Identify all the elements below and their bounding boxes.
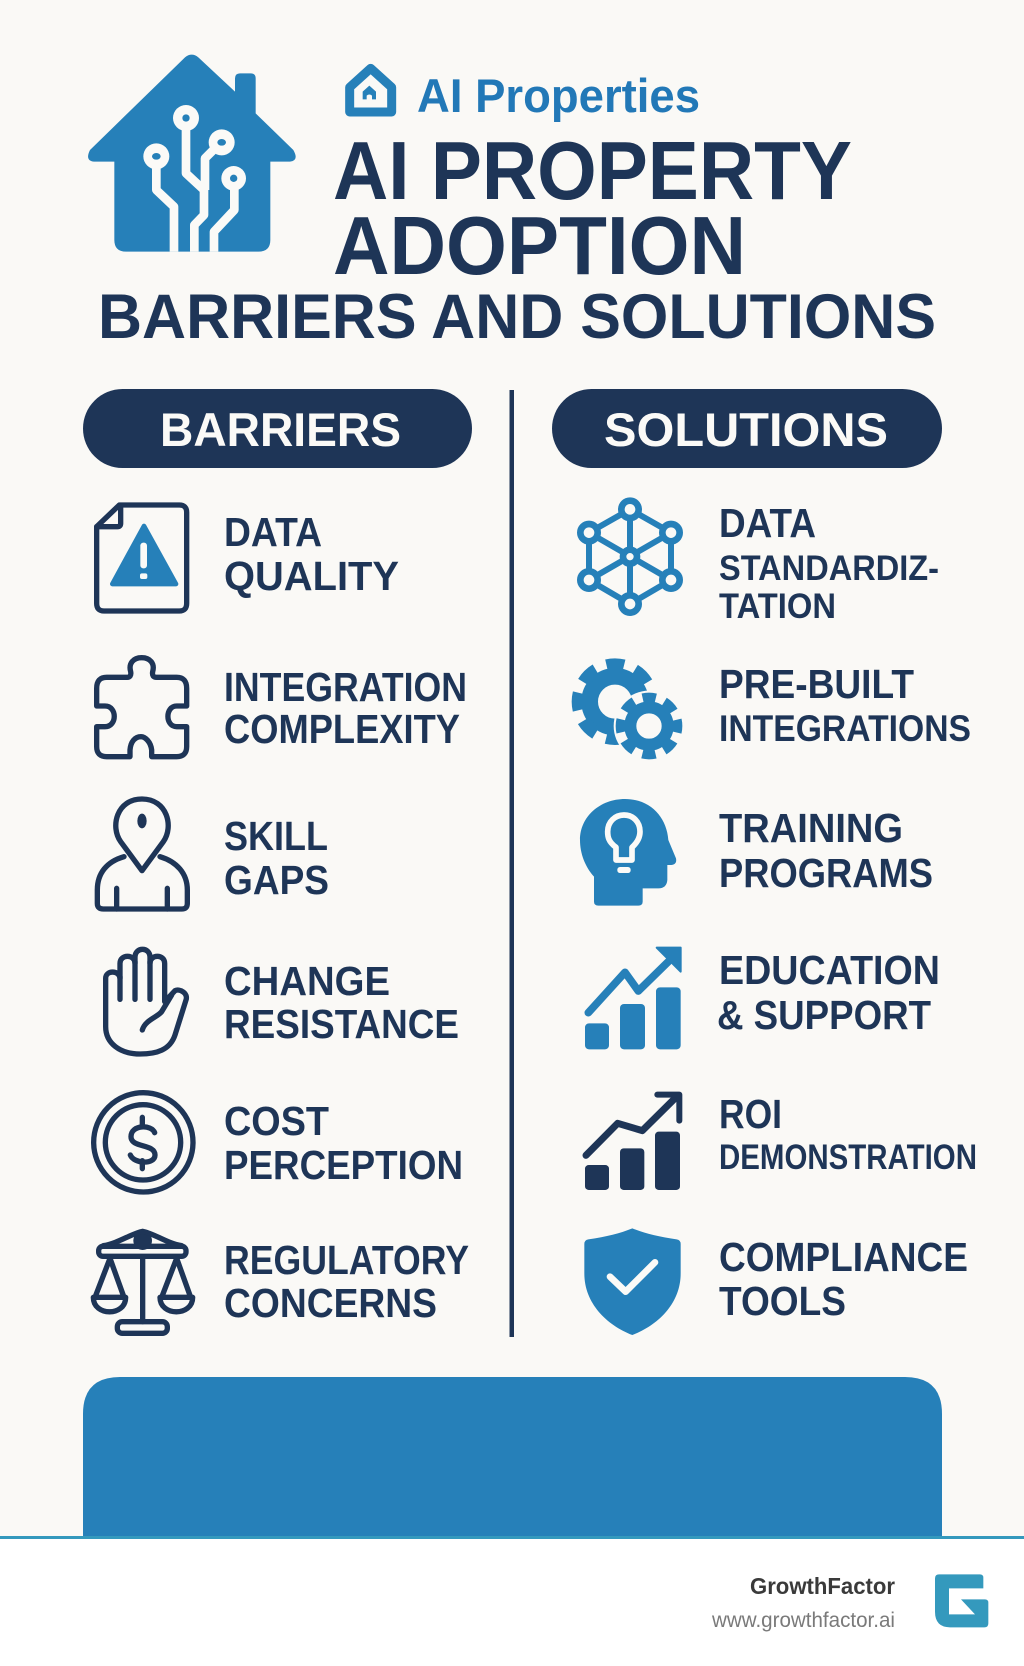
label: COMPLIANCE: [719, 1234, 968, 1280]
header: [88, 55, 936, 352]
label: [224, 664, 467, 752]
label: DEMONSTRATION: [719, 1138, 977, 1177]
footer url: www.growthfactor.ai: [711, 1609, 895, 1632]
label: PROGRAMS: [719, 850, 933, 896]
label: [719, 805, 933, 896]
icon: puzzle piece: [97, 658, 187, 757]
label: [719, 500, 939, 626]
label: [224, 813, 329, 903]
barrier: skill gaps: [97, 799, 329, 909]
label: SKILL: [224, 813, 328, 859]
label: TOOLS: [719, 1278, 846, 1324]
solution: training programs: [580, 799, 933, 906]
brand name: AI Properties: [417, 69, 700, 122]
panel: barriers: [83, 389, 472, 1333]
title: [333, 124, 852, 292]
icon: gears: [578, 665, 684, 761]
label: STANDARDIZ-: [719, 549, 939, 588]
barrier: data quality: [97, 505, 399, 611]
icon: house with circuit lines: [88, 55, 296, 252]
icon: navy bar chart with arrow: [585, 1095, 680, 1190]
solution: pre-built integrations: [578, 661, 971, 761]
icon: raised hand: [106, 949, 186, 1054]
label: [717, 947, 940, 1038]
label: [224, 509, 399, 599]
label: [719, 1091, 977, 1177]
label: QUALITY: [224, 553, 399, 599]
label: [719, 1234, 968, 1324]
label: GAPS: [224, 857, 329, 903]
label: DATA: [719, 500, 816, 546]
label: & SUPPORT: [717, 992, 931, 1038]
label: PRE-BUILT: [719, 661, 914, 707]
barrier: cost perception: [94, 1093, 463, 1192]
label: TATION: [719, 587, 836, 626]
barriers heading pill: BARRIERS: [160, 403, 401, 456]
label: COST: [224, 1098, 329, 1144]
label: [224, 1098, 463, 1188]
footer brand name: GrowthFactor: [750, 1573, 895, 1599]
icon: document warning: [97, 505, 187, 611]
solutions heading pill: SOLUTIONS: [604, 403, 888, 456]
label: CONCERNS: [224, 1280, 437, 1326]
solution: roi demonstration: [585, 1091, 977, 1190]
icon: GrowthFactor G logo: [935, 1574, 988, 1627]
label: [719, 661, 971, 749]
barriers heading pill: [83, 389, 472, 468]
label: COMPLEXITY: [224, 706, 460, 752]
label: INTEGRATIONS: [719, 708, 971, 749]
barrier: regulatory concerns: [93, 1231, 469, 1333]
label: PERCEPTION: [224, 1142, 463, 1188]
label: RESISTANCE: [224, 1001, 459, 1047]
label: [224, 1237, 469, 1326]
icon: blue bar chart with arrow: [585, 948, 681, 1049]
blue callout panel: [83, 1377, 942, 1536]
icon: person with pin: [97, 799, 187, 909]
title: ADOPTION: [333, 199, 746, 292]
solution: education and support: [585, 947, 940, 1049]
icon: hexagonal network: [580, 501, 680, 613]
solutions heading pill: [552, 389, 942, 468]
subtitle: BARRIERS AND SOLUTIONS: [98, 282, 936, 352]
barrier: change resistance: [106, 949, 459, 1054]
icon: small house logo: [350, 68, 392, 112]
panel: solutions: [552, 389, 977, 1335]
label: [224, 958, 459, 1047]
label: DATA: [224, 509, 322, 555]
icon: balance scales: [93, 1231, 193, 1333]
label: REGULATORY: [224, 1237, 469, 1283]
label: INTEGRATION: [224, 664, 467, 710]
footer: [0, 1536, 1024, 1666]
barrier: integration complexity: [97, 658, 467, 757]
label: CHANGE: [224, 958, 390, 1004]
icon: shield with check: [584, 1228, 681, 1335]
solution: data standardization: [580, 500, 939, 626]
label: ROI: [719, 1091, 782, 1137]
icon: head with lightbulb: [580, 799, 676, 906]
title: AI PROPERTY: [333, 124, 852, 217]
icon: dollar coin: [94, 1093, 193, 1192]
label: TRAINING: [719, 805, 903, 851]
label: EDUCATION: [719, 947, 940, 993]
solution: compliance tools: [584, 1228, 968, 1335]
